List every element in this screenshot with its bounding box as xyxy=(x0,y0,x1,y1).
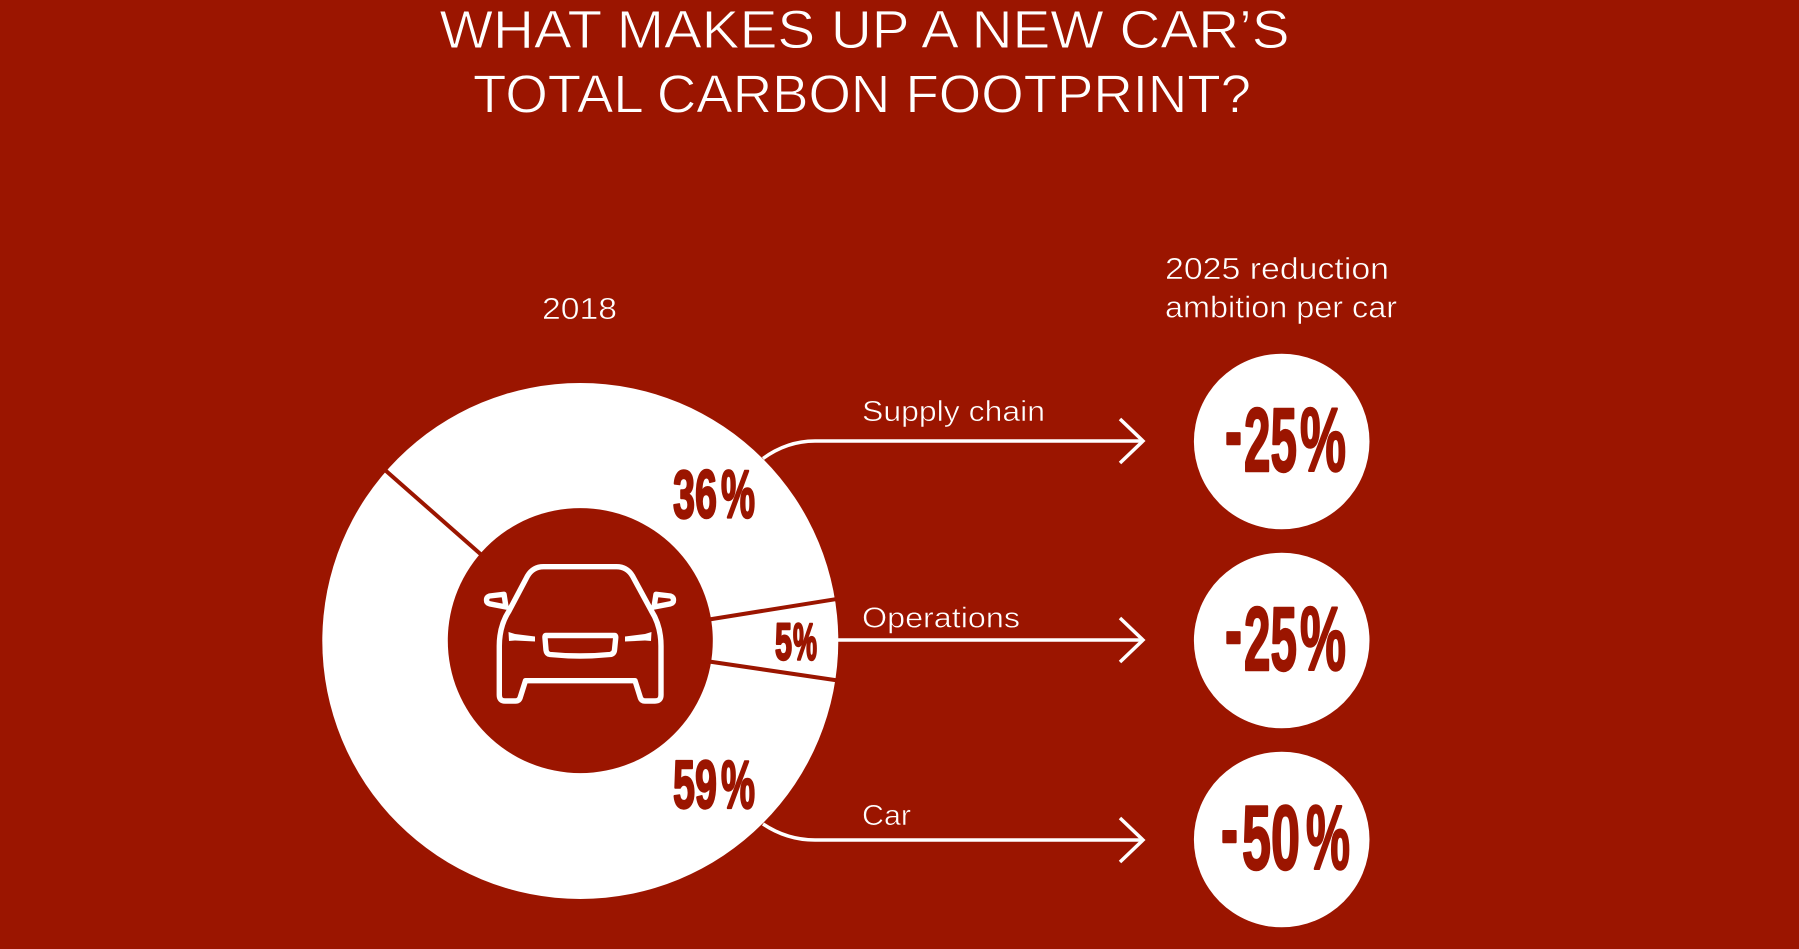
value: 5%: % xyxy=(793,614,817,672)
arrow: operations xyxy=(838,618,1143,662)
value: 59%: % xyxy=(721,747,755,823)
title xyxy=(440,0,1290,124)
badge: car -50%: - xyxy=(1221,779,1238,880)
icon: car front xyxy=(486,567,674,701)
heading: 2025 reduction ambition per car: 2025 reduction xyxy=(1165,251,1389,286)
badge: car -50% xyxy=(1194,752,1369,927)
label: car: Car xyxy=(862,800,911,832)
label: operations: Operations xyxy=(862,602,1020,634)
badge: supply chain -25%: - xyxy=(1225,382,1242,482)
badge: operations -25%: % xyxy=(1300,590,1346,690)
badge: supply chain -25%: 25 xyxy=(1244,391,1297,491)
value: 59%: 59 xyxy=(673,747,717,823)
label: supply chain: Supply chain xyxy=(862,396,1045,428)
badge: supply chain -25% xyxy=(1194,354,1369,529)
title: WHAT MAKES UP A NEW CAR’S xyxy=(440,0,1290,60)
arrow: car xyxy=(763,818,1143,862)
value: 5%: 5 xyxy=(775,614,792,672)
donut chart xyxy=(322,383,838,899)
badge: operations -25% xyxy=(1194,553,1369,728)
heading: 2025 reduction ambition per car: ambition per car xyxy=(1165,290,1397,324)
arrow: supply chain xyxy=(763,419,1143,463)
value: 36%: % xyxy=(721,456,755,532)
heading: 2025 reduction ambition per car xyxy=(1165,251,1397,324)
badge: operations -25%: - xyxy=(1225,581,1242,681)
title: TOTAL CARBON FOOTPRINT? xyxy=(473,64,1251,124)
value: 5% xyxy=(775,614,817,672)
badge: operations -25%: 25 xyxy=(1244,590,1297,690)
badge: car -50%: 50 xyxy=(1242,788,1300,889)
badge: supply chain -25%: % xyxy=(1300,391,1346,491)
badge: car -50%: % xyxy=(1306,788,1350,889)
heading: 2018: 2018 xyxy=(542,291,617,326)
value: 36%: 36 xyxy=(673,456,717,532)
